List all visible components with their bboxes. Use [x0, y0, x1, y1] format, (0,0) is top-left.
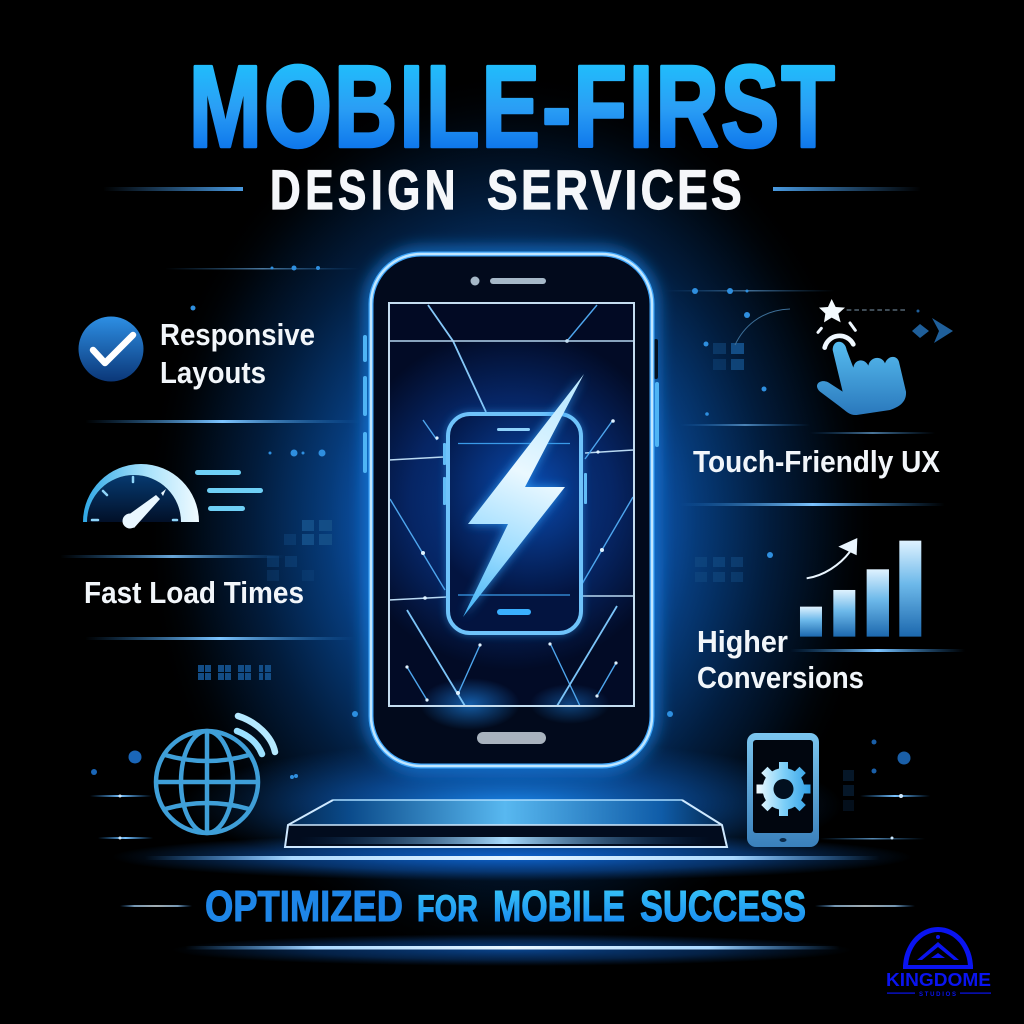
lightning bolt [463, 374, 584, 617]
logo: kingdome studios: KINGDOME [886, 970, 991, 990]
title line two: SERVICES [487, 158, 745, 221]
gear [756, 762, 810, 816]
icon: check badge [78, 316, 144, 382]
decorative dots and pixel grids [91, 266, 910, 840]
feature: higher conversions [697, 538, 921, 695]
footer tagline: MOBILE [493, 882, 625, 931]
label: responsive layouts: Layouts [160, 355, 266, 390]
platform [285, 800, 727, 847]
logo: kingdome studios: STUDIOS [919, 992, 956, 998]
footer tagline [205, 882, 806, 931]
title line two: DESIGN [270, 158, 460, 221]
footer tagline: OPTIMIZED [205, 882, 403, 931]
icon: globe with signal [156, 716, 275, 833]
feature: touch-friendly ux [693, 299, 953, 479]
bar chart with arrow [800, 538, 921, 637]
icon: tapping hand [817, 299, 907, 415]
decorative light lines [60, 187, 965, 966]
title [189, 42, 837, 221]
inner phone [443, 414, 587, 633]
phone side buttons [363, 335, 659, 473]
phone home button [477, 732, 546, 744]
phone screen [389, 303, 634, 730]
phone speaker [470, 276, 546, 286]
footer tagline: SUCCESS [640, 882, 806, 931]
circuit lines [389, 305, 633, 706]
label: fast load times: Fast Load Times [84, 575, 304, 610]
central phone [363, 254, 659, 766]
title line two [270, 158, 745, 221]
phone body [371, 254, 652, 766]
label: responsive layouts: Responsive [160, 317, 315, 352]
logo: kingdome studios [886, 927, 991, 998]
phone glow [371, 254, 652, 766]
icon: speedometer [83, 464, 263, 528]
feature: fast load times [83, 464, 304, 610]
footer tagline: FOR [417, 888, 478, 929]
decorative arrow marks [912, 310, 953, 343]
icon: mini phone with gear [747, 733, 819, 847]
title line one: MOBILE-FIRST [189, 42, 837, 172]
feature: responsive layouts [78, 316, 315, 390]
label: touch-friendly ux: Touch-Friendly UX [693, 444, 940, 479]
label: higher conversions: Conversions [697, 660, 864, 695]
label: higher conversions: Higher [697, 624, 788, 659]
